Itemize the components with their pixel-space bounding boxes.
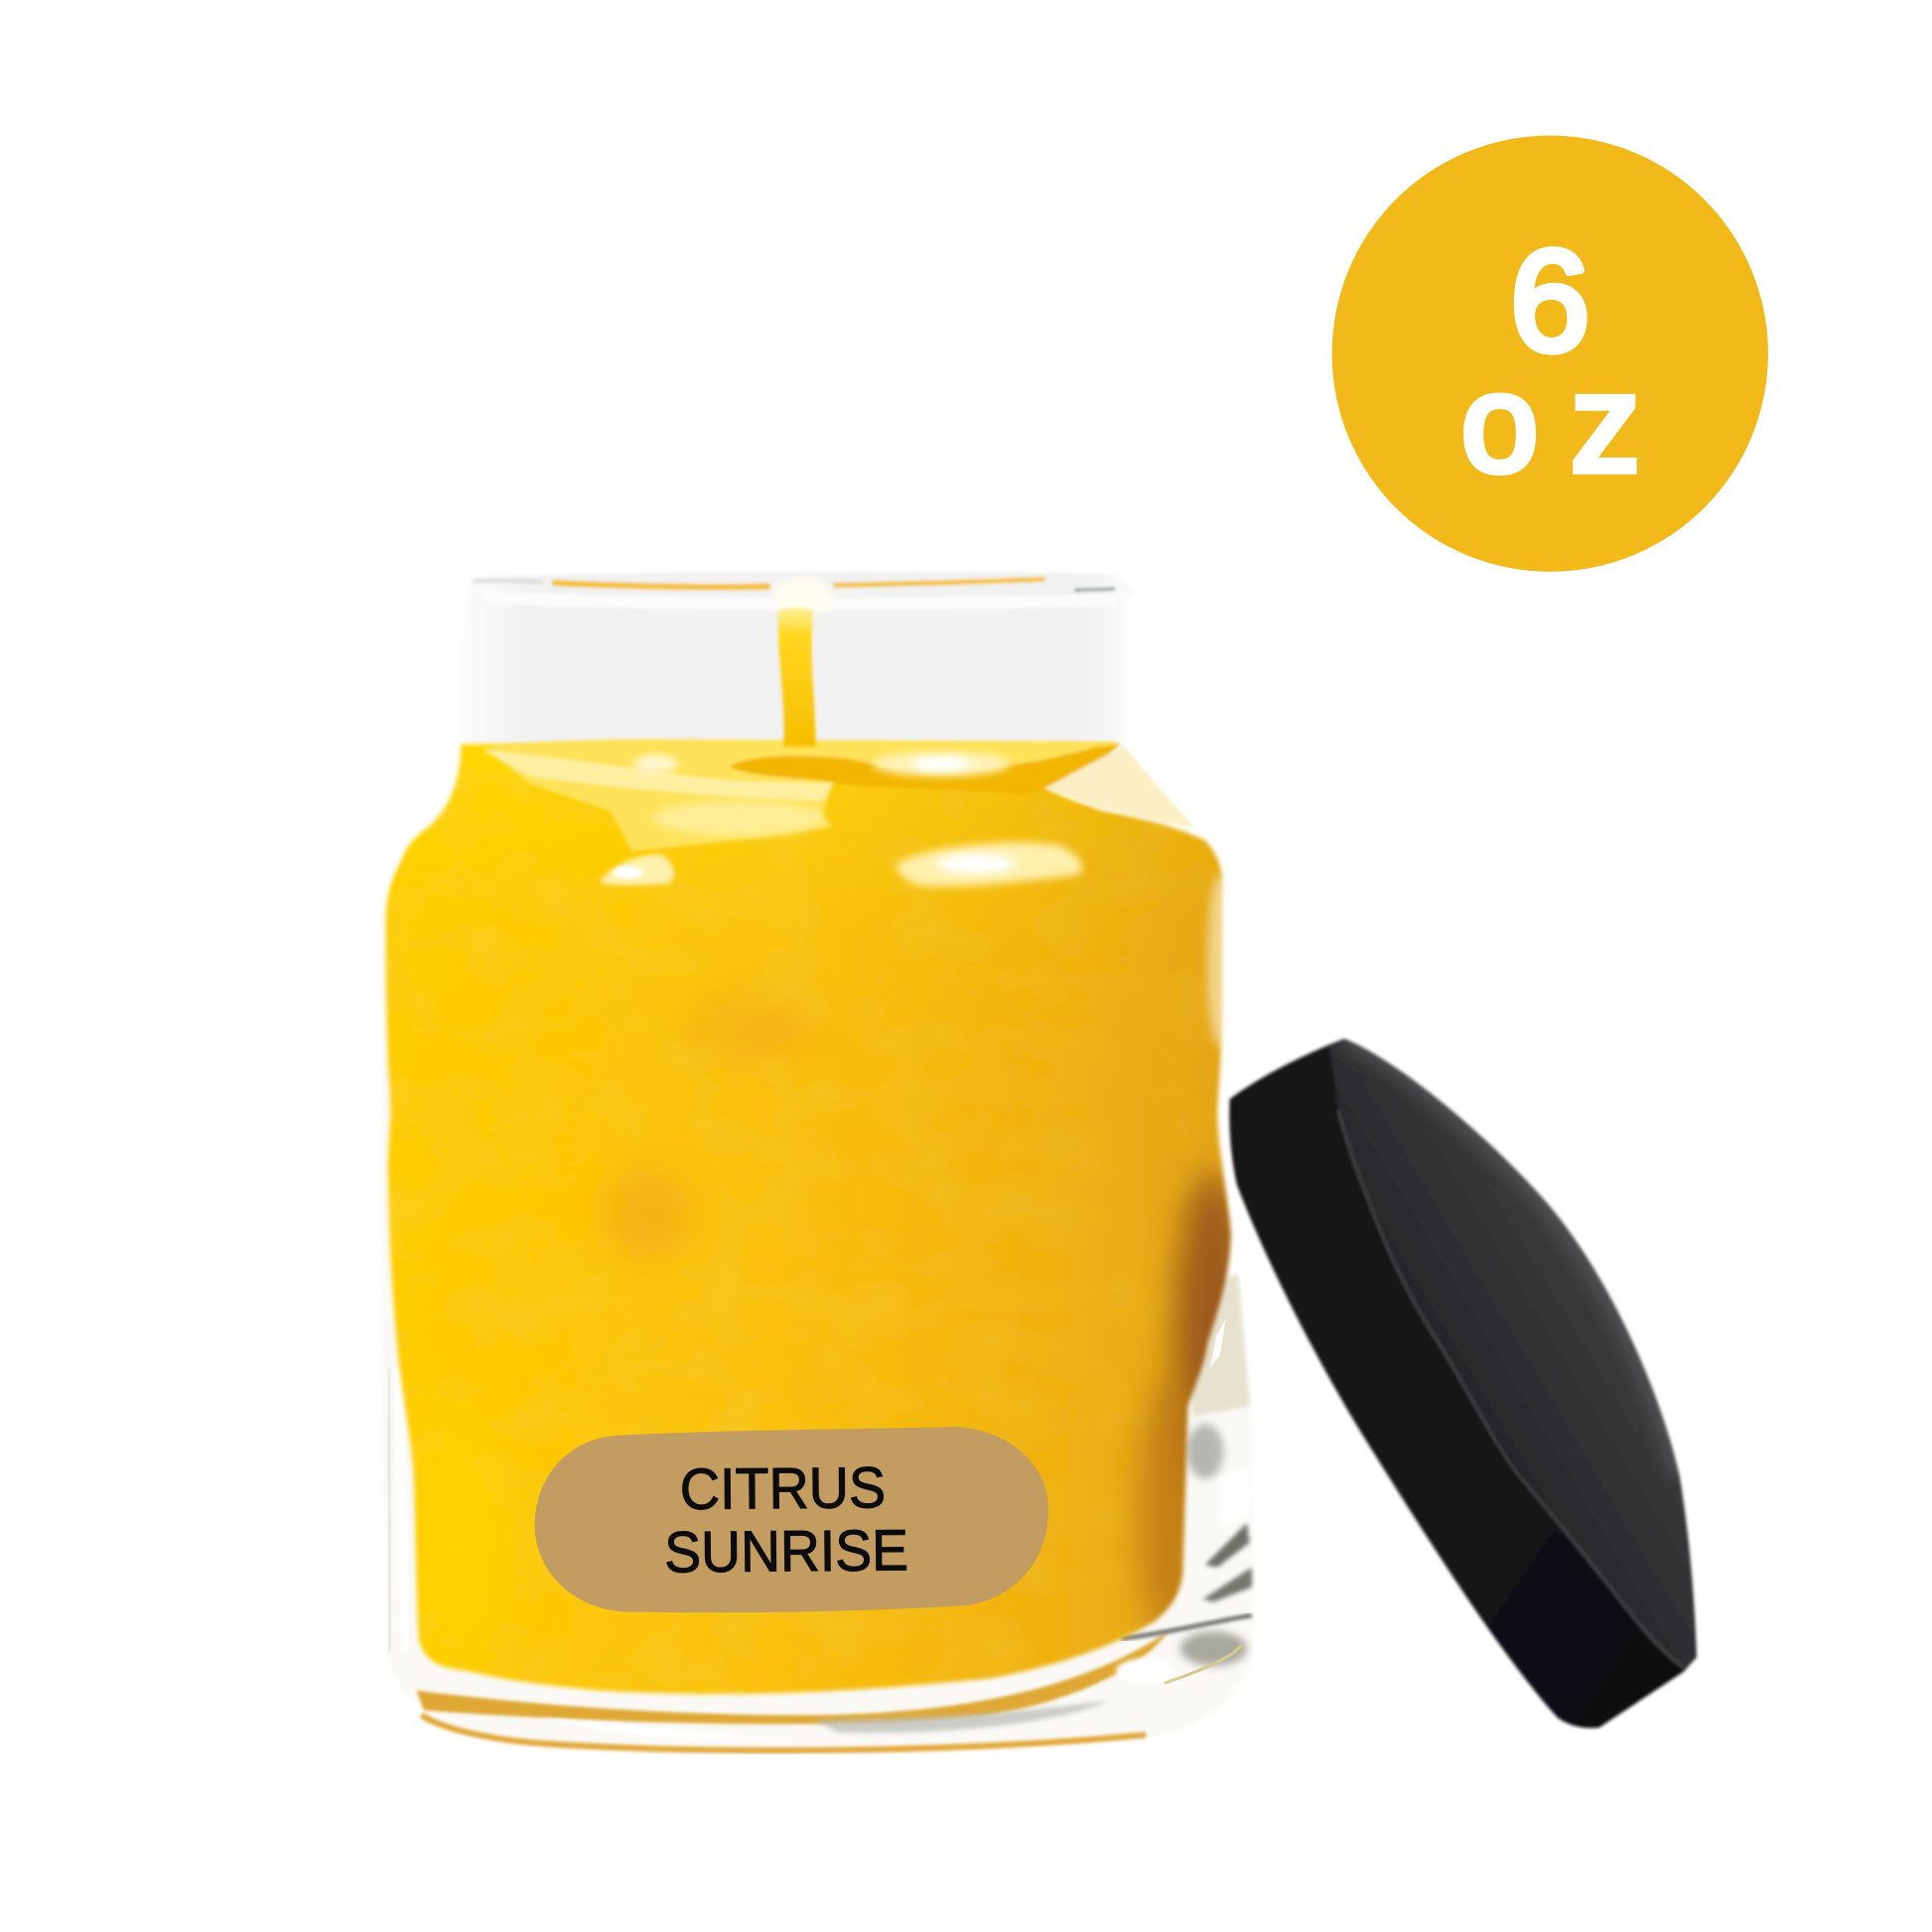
wax fill (369, 740, 1257, 1713)
wax top surface and reflections (483, 740, 1195, 852)
product image: candle jar with lid and size badge (381, 135, 1768, 1754)
wick (778, 608, 816, 747)
wax highlights (600, 752, 1082, 887)
label: Citrus Sunrise: CITRUS (680, 1455, 886, 1522)
right glass streaks (1116, 1274, 1252, 1683)
lid seam (1338, 1110, 1683, 1667)
glass neck (460, 572, 1136, 761)
black lid leaning on jar (1229, 1029, 1707, 1728)
bottom amber base (416, 1631, 1169, 1725)
size badge: 6 oz: oz (1461, 346, 1640, 500)
label: Citrus Sunrise (535, 1427, 1048, 1612)
label: Citrus Sunrise: SUNRISE (664, 1518, 908, 1585)
lid dome (1318, 1029, 1707, 1682)
size badge: 6 oz (1332, 136, 1768, 572)
size badge: 6 oz: 6 (1510, 220, 1589, 380)
glass lower body (382, 936, 1254, 1751)
left glass edge (397, 1368, 407, 1651)
candle jar (369, 572, 1257, 1751)
lid rim (1229, 1038, 1697, 1728)
